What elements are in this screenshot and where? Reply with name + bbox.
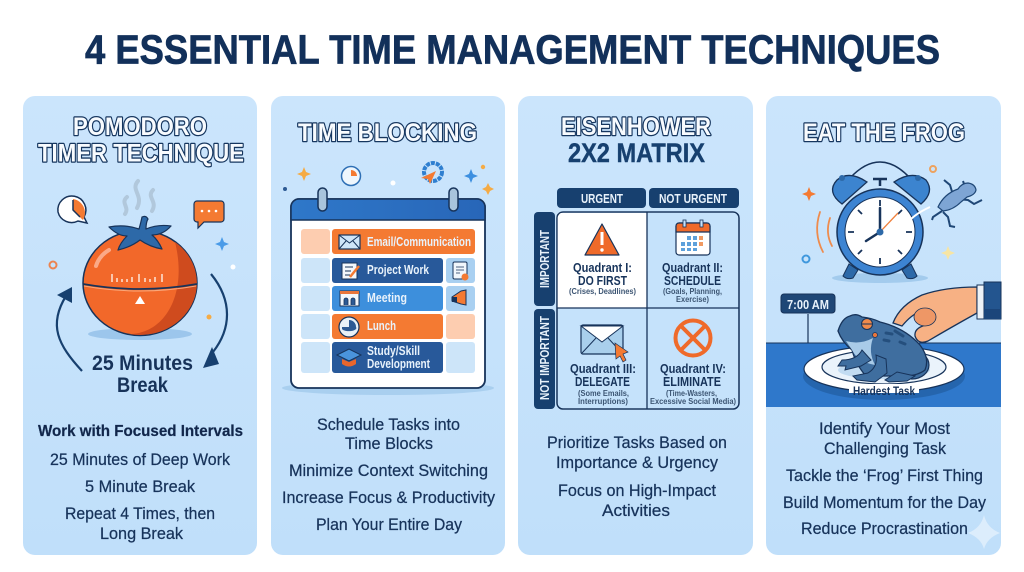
text: pomodoro points: Long Break	[100, 524, 183, 543]
label: 25 minutes break	[92, 352, 193, 397]
table band	[766, 343, 1001, 407]
text: eisenhower points: Activities	[602, 501, 670, 520]
arrow: cycle right	[203, 274, 227, 368]
block: email: Email/Communication	[367, 235, 471, 249]
heading: eisenhower: 2X2 MATRIX	[568, 138, 705, 168]
quadrant 1: DO FIRST	[578, 273, 627, 288]
label: hardest task: Hardest Task	[853, 384, 915, 398]
quadrant 1	[569, 224, 636, 296]
text: eisenhower points: Importance & Urgency	[556, 453, 718, 472]
title: 4 ESSENTIAL TIME MANAGEMENT TECHNIQUES	[85, 26, 940, 72]
axis: not urgent: NOT URGENT	[659, 191, 727, 206]
text: eisenhower points	[547, 433, 727, 520]
text: pomodoro points: 25 Minutes of Deep Work	[50, 450, 230, 469]
block: lunch	[332, 314, 443, 339]
heading: eisenhower: EISENHOWER	[561, 113, 711, 141]
heading: eat the frog: EAT THE FROG	[803, 119, 965, 147]
quadrant 3: (Some Emails,	[578, 388, 629, 398]
quadrant 3	[570, 325, 636, 406]
text: time blocking points	[282, 415, 495, 534]
heading: eisenhower	[561, 113, 711, 168]
icon: tomato timer	[83, 216, 197, 340]
quadrant 1: (Crises, Deadlines)	[569, 286, 636, 296]
axis: urgent	[557, 188, 646, 208]
axis: not important: NOT IMPORTANT	[537, 316, 552, 400]
panel: pomodoro	[23, 96, 257, 555]
axis: not urgent	[649, 188, 739, 208]
right cells	[446, 258, 475, 373]
block: meeting	[332, 286, 466, 311]
text: pomodoro points: Work with Focused Intervals	[38, 423, 243, 440]
decorations around clock	[802, 166, 955, 262]
icon: alarm clock	[832, 162, 930, 283]
heading: pomodoro: POMODORO	[73, 113, 207, 141]
quadrant 3: Interruptions)	[578, 396, 628, 406]
block: email	[332, 229, 475, 254]
panel: eat the frog	[766, 96, 1001, 555]
quadrant 3: DELEGATE	[575, 374, 630, 389]
text: pomodoro points: Repeat 4 Times, then	[65, 504, 215, 523]
sign: 7:00 am: 7:00 AM	[787, 298, 829, 312]
block: study: Study/Skill	[367, 344, 420, 358]
text: time blocking points: Time Blocks	[345, 434, 433, 453]
text: time blocking points: Schedule Tasks into	[317, 415, 460, 434]
quadrant 4: (Time-Wasters,	[666, 388, 717, 398]
axis: important: IMPORTANT	[537, 230, 552, 288]
axis: important	[534, 212, 555, 306]
axis: not important	[534, 309, 555, 409]
text: frog points	[783, 419, 986, 538]
icon: calendar	[282, 188, 494, 395]
text: time blocking points: Increase Focus & Productivity	[282, 488, 495, 507]
quadrant 4: Quadrant IV:	[660, 361, 726, 376]
icon: chat bubble	[194, 201, 224, 228]
grid	[557, 212, 739, 409]
icon: plate	[803, 346, 965, 400]
panel: eisenhower	[518, 96, 753, 555]
decorative icons above calendar	[283, 163, 494, 195]
heading: pomodoro: TIMER TECHNIQUE	[38, 140, 244, 168]
icon: toad	[838, 315, 929, 382]
quadrant 3: Quadrant III:	[570, 361, 636, 376]
matrix	[534, 188, 739, 409]
axis: urgent: URGENT	[581, 191, 623, 206]
quadrant 4	[650, 320, 736, 406]
text: eisenhower points: Prioritize Tasks Based on	[547, 433, 727, 452]
text: frog points: Tackle the ‘Frog’ First Thing	[786, 466, 983, 485]
heading: pomodoro	[38, 113, 244, 168]
left cells	[301, 229, 330, 373]
quadrant 2	[662, 220, 723, 304]
icon: hand	[893, 282, 1001, 342]
text: frog points: Reduce Procrastination	[801, 519, 968, 538]
block: project work	[332, 258, 468, 283]
quadrant 4: ELIMINATE	[663, 374, 721, 389]
label: 25 minutes break: 25 Minutes	[92, 352, 193, 375]
quadrant 2: Quadrant II:	[662, 260, 723, 275]
sign: 7:00 am	[781, 294, 835, 344]
icon: jumping frog	[932, 180, 982, 227]
quadrant 2: (Goals, Planning,	[663, 286, 722, 296]
decorative sparkle bottom right	[968, 515, 1000, 549]
quadrant 2: Exercise)	[676, 294, 709, 304]
block: project work: Project Work	[367, 263, 429, 277]
text: time blocking points: Minimize Context Switching	[289, 461, 488, 480]
text: pomodoro points	[38, 423, 243, 543]
icon: clock bubble	[58, 196, 87, 223]
panel: time blocking	[271, 96, 505, 555]
heading: time blocking: TIME BLOCKING	[298, 119, 477, 147]
text: frog points: Identify Your Most	[819, 419, 950, 438]
text: pomodoro points: 5 Minute Break	[85, 477, 195, 496]
decorative sparkles	[50, 237, 236, 320]
block: meeting: Meeting	[367, 291, 407, 305]
text: frog points: Build Momentum for the Day	[783, 493, 986, 512]
text: frog points: Challenging Task	[824, 439, 946, 458]
quadrant 2: SCHEDULE	[664, 273, 721, 288]
quadrant 4: Excessive Social Media)	[650, 396, 736, 406]
icon: steam	[124, 181, 154, 214]
block: study	[332, 342, 443, 373]
text: time blocking points: Plan Your Entire Day	[316, 515, 462, 534]
block: study: Development	[367, 357, 431, 371]
text: eisenhower points: Focus on High-Impact	[558, 481, 716, 500]
arrow: cycle left	[57, 287, 82, 371]
label: 25 minutes break: Break	[117, 374, 168, 397]
block: lunch: Lunch	[367, 319, 396, 333]
quadrant 1: Quadrant I:	[573, 260, 632, 275]
